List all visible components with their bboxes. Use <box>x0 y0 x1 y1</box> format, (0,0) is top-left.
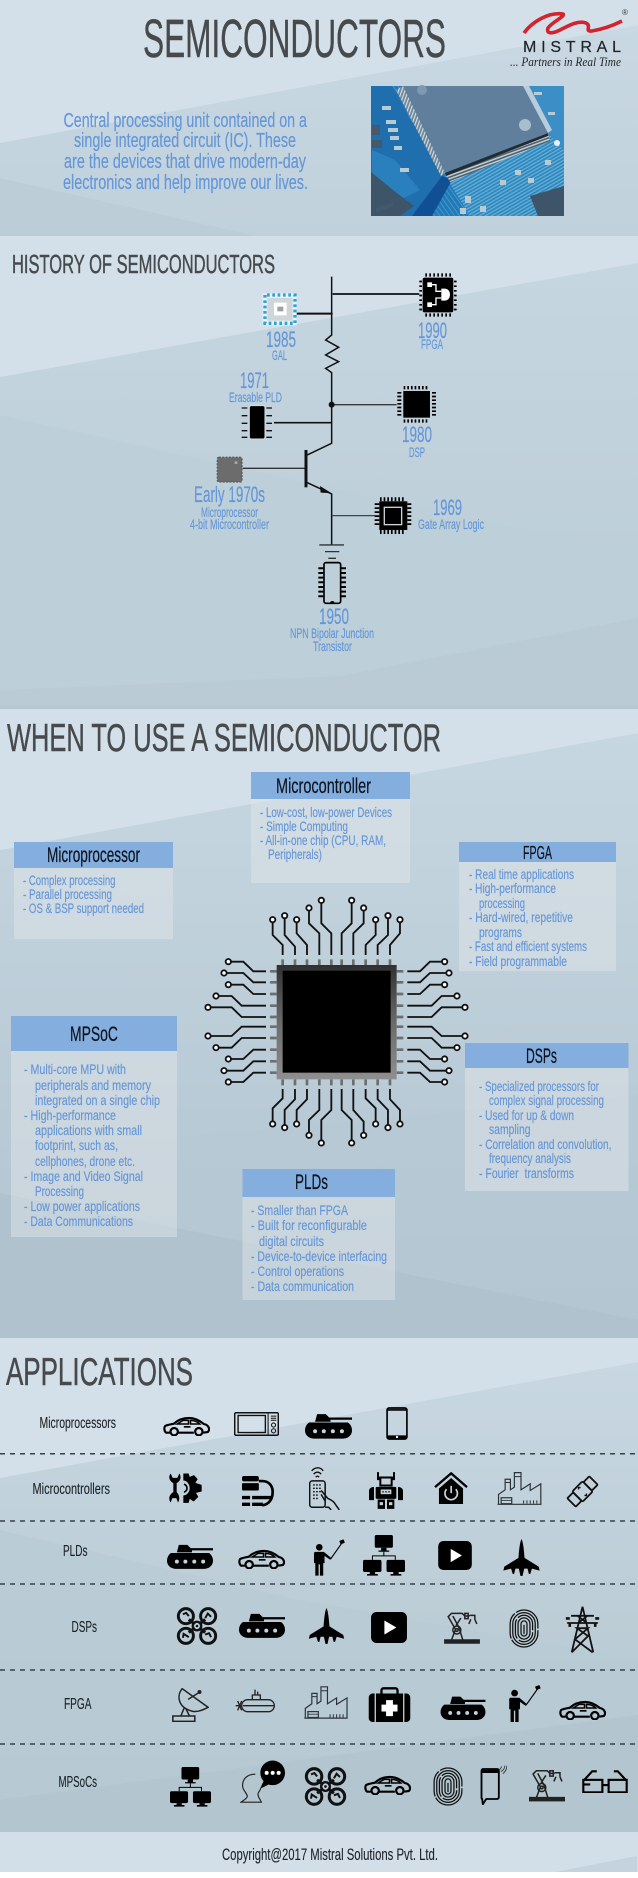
icon: smartphone <box>387 1408 407 1439</box>
panel: DSPs card: frequency analysis <box>489 1150 571 1166</box>
label: 1969 Gate Array Logic: 1969 <box>433 495 462 520</box>
label: 1990 FPGA <box>418 318 447 352</box>
icon: fingerprint <box>510 1610 538 1647</box>
icon: jet <box>503 1539 540 1576</box>
panel: MPSoC card: - High-performance <box>24 1107 116 1123</box>
panel: MPSoC card: integrated on a single chip <box>35 1092 160 1108</box>
logo: Mistral <box>510 8 628 69</box>
intro text: single integrated circuit (IC). These <box>74 129 296 152</box>
chip trace terminals <box>205 898 468 1146</box>
icon: selfie person <box>314 1539 345 1576</box>
label: 1971 Erasable PLD: 1971 <box>240 368 269 393</box>
panel: MPSoC card: Processing <box>35 1183 84 1199</box>
chip die <box>283 971 391 1073</box>
photo: circuit board with chip <box>371 85 564 216</box>
row label: Microprocessors <box>40 1415 116 1432</box>
panel: FPGA card: - High-performance <box>469 880 556 896</box>
registered mark: ® <box>622 8 628 17</box>
icon: car <box>239 1551 284 1568</box>
panel: FPGA card: - Real time applications <box>469 866 574 882</box>
row: FPGA <box>64 1685 605 1722</box>
icon: 1969 gate array chip <box>375 497 411 534</box>
icon: car <box>164 1418 209 1435</box>
panel: PLDs card: - Data communication <box>251 1278 354 1294</box>
panel: FPGA card: FPGA <box>523 843 552 863</box>
label: Early 1970s: Microprocessor <box>201 504 258 520</box>
panel: microprocessor card <box>14 842 173 939</box>
panel: microprocessor card: Microprocessor <box>47 844 140 867</box>
icon: car <box>560 1702 605 1719</box>
icon: wrench and gear <box>169 1474 202 1503</box>
icon: tank <box>167 1545 213 1569</box>
row label: MPSoCs <box>58 1774 97 1791</box>
row: MPSoCs <box>58 1760 627 1807</box>
chart: history circuit timeline <box>190 273 484 654</box>
illustration: central processor chip <box>205 898 468 1146</box>
panel: microcontroller card <box>251 772 410 883</box>
row label: PLDs <box>63 1543 88 1560</box>
panel: microcontroller card: - All-in-one chip (CPU, RAM, <box>260 832 386 848</box>
icon: robot <box>369 1472 403 1509</box>
panel: intro background <box>0 0 638 236</box>
logo tagline: ... Partners in Real Time <box>510 54 621 69</box>
icon: magnetic device <box>242 1476 273 1506</box>
panel: PLDs card: PLDs <box>295 1171 328 1194</box>
heading: history: HISTORY OF SEMICONDUCTORS <box>12 249 275 279</box>
logo wordmark: MISTRAL <box>523 39 621 56</box>
intro text: Central processing unit contained on a <box>64 109 307 132</box>
panel: MPSoC card: applications with small <box>35 1122 142 1138</box>
row label: Microcontrollers <box>32 1481 110 1498</box>
icon: network <box>170 1767 211 1807</box>
icon: smartwatch <box>566 1475 599 1508</box>
label: 1950 NPN transistor: NPN Bipolar Junction <box>290 625 374 641</box>
icon: fingerprint <box>434 1768 462 1805</box>
intro text: are the devices that drive modern-day <box>64 150 307 173</box>
panel: microprocessor card: - OS & BSP support needed <box>23 900 144 916</box>
panel: PLDs card: - Device-to-device interfacing <box>251 1248 387 1264</box>
label: 1969 Gate Array Logic: Gate Array Logic <box>418 516 484 532</box>
icon: 1990 FPGA chip <box>419 273 457 317</box>
icon: medical kit <box>369 1688 410 1722</box>
icon: robot arm <box>445 1613 479 1643</box>
intro text <box>63 109 308 194</box>
panel: MPSoC card <box>11 1016 177 1237</box>
panel: MPSoC card: MPSoC <box>70 1023 118 1046</box>
panel: usage background <box>0 706 638 1338</box>
chip traces <box>211 903 462 1140</box>
icon: red swoosh <box>524 14 622 33</box>
label: 1985 GAL: 1985 <box>266 327 296 352</box>
icon: video play <box>438 1541 472 1570</box>
icon: video play <box>371 1612 407 1643</box>
icon: 1950 transistor chip <box>318 563 346 603</box>
panel: MPSoC card: - Multi-core MPU with <box>24 1061 126 1077</box>
panel: microprocessor card: - Complex processing <box>23 872 116 888</box>
icon: network <box>363 1535 405 1576</box>
label: 1990 FPGA: FPGA <box>421 336 443 352</box>
icon: remote control <box>310 1468 339 1510</box>
panel: DSPs card: DSPs <box>526 1045 557 1068</box>
icon: factory <box>304 1687 348 1718</box>
panel: MPSoC card: - Low power applications <box>24 1198 140 1214</box>
label: 1950 NPN transistor <box>290 604 374 654</box>
label: 1980 DSP <box>402 422 432 460</box>
icon: 1971 erasable PLD chip <box>242 406 272 439</box>
panel: PLDs card: - Control operations <box>251 1263 344 1279</box>
label: Early 1970s <box>190 482 269 532</box>
panel: PLDs card <box>242 1169 395 1300</box>
icon: jet <box>309 1608 344 1644</box>
icon: power tower <box>566 1607 599 1652</box>
label: 1985 GAL: GAL <box>272 347 287 363</box>
label: Early 1970s: 4-bit Microcontroller <box>190 516 269 532</box>
panel: microcontroller card: Microcontroller <box>276 775 371 798</box>
panel: history background <box>0 236 638 708</box>
icon: tank <box>239 1614 285 1638</box>
icon: robot arm <box>530 1771 564 1801</box>
label: 1971 Erasable PLD <box>229 368 282 405</box>
icon: speech head <box>241 1760 285 1802</box>
label: 1971 Erasable PLD: Erasable PLD <box>229 389 282 405</box>
icon: smart home <box>435 1473 467 1504</box>
panel: DSPs card: - Fourier transforms <box>479 1165 574 1181</box>
panel: DSPs card: - Used for up & down <box>479 1107 574 1123</box>
panel: microprocessor card: - Parallel processing <box>23 886 112 902</box>
panel: applications background <box>0 1338 638 1832</box>
panel: MPSoC card: - Image and Video Signal <box>24 1168 143 1184</box>
panel: MPSoC card: - Data Communications <box>24 1213 133 1229</box>
row: microcontrollers <box>32 1468 599 1510</box>
panel: microcontroller card: - Low-cost, low-power Devices <box>260 804 392 820</box>
row label: DSPs <box>72 1619 97 1636</box>
icon: tank <box>305 1414 352 1439</box>
icon: 3D glasses <box>583 1771 627 1792</box>
panel: MPSoC card: footprint, such as, <box>35 1137 118 1153</box>
label: 1950 NPN transistor: Transistor <box>313 638 352 654</box>
icon: microwave <box>235 1413 278 1435</box>
panel: PLDs card: digital circuits <box>259 1233 324 1249</box>
icon: factory <box>498 1473 541 1504</box>
panel: FPGA card: - Field programmable <box>469 953 567 969</box>
label: 1980 DSP: 1980 <box>402 422 432 447</box>
row label: FPGA <box>64 1696 92 1713</box>
label: Early 1970s: Early 1970s <box>194 482 265 507</box>
panel: MPSoC card: peripherals and memory <box>35 1077 151 1093</box>
intro text: electronics and help improve our lives. <box>63 171 308 194</box>
icon: car <box>365 1777 410 1794</box>
icon: submarine <box>236 1690 274 1712</box>
icon: connected phone <box>482 1766 507 1804</box>
panel: PLDs card: - Smaller than FPGA <box>251 1202 348 1218</box>
panel: FPGA card <box>459 842 616 971</box>
panel: MPSoC card: cellphones, drone etc. <box>35 1153 135 1169</box>
panel: footer background <box>0 1832 638 1872</box>
label: 1950 NPN transistor: 1950 <box>319 604 349 629</box>
circuit diagram wires <box>243 277 419 558</box>
icon: drone <box>306 1769 345 1804</box>
label: 1990 FPGA: 1990 <box>418 318 447 343</box>
heading: applications: APPLICATIONS <box>6 1351 193 1394</box>
icon: 1980 DSP chip <box>397 386 436 423</box>
panel: FPGA card: programs <box>479 924 522 940</box>
chip bezel <box>277 965 397 1079</box>
panel: DSPs card <box>465 1043 628 1191</box>
icon: early 1970s microprocessor chip <box>217 457 242 482</box>
row: microprocessors <box>40 1408 407 1439</box>
row: PLDs <box>63 1535 540 1576</box>
panel: DSPs card: sampling <box>489 1121 530 1137</box>
icon: satellite dish <box>173 1689 208 1721</box>
panel: FPGA card: - Hard-wired, repetitive <box>469 909 573 925</box>
chip pins <box>270 959 403 1085</box>
panel: microcontroller card: - Simple Computing <box>260 818 348 834</box>
panel: microcontroller card: Peripherals) <box>268 846 322 862</box>
icon: drone <box>178 1609 216 1643</box>
icon: selfie person <box>509 1685 541 1722</box>
label: 1980 DSP: DSP <box>409 444 425 460</box>
panel: FPGA card: - Fast and efficient systems <box>469 938 587 954</box>
icon: tank <box>441 1697 485 1720</box>
panel: FPGA card: processing <box>479 895 525 911</box>
footer copyright: Copyright@2017 Mistral Solutions Pvt. Ltd. <box>222 1845 438 1864</box>
row: DSPs <box>72 1607 599 1652</box>
panel: PLDs card: - Built for reconfigurable <box>251 1217 367 1233</box>
label: 1969 Gate Array Logic <box>418 495 484 532</box>
icon: 1985 GAL chip <box>263 293 297 325</box>
label: 1985 GAL <box>266 327 296 363</box>
